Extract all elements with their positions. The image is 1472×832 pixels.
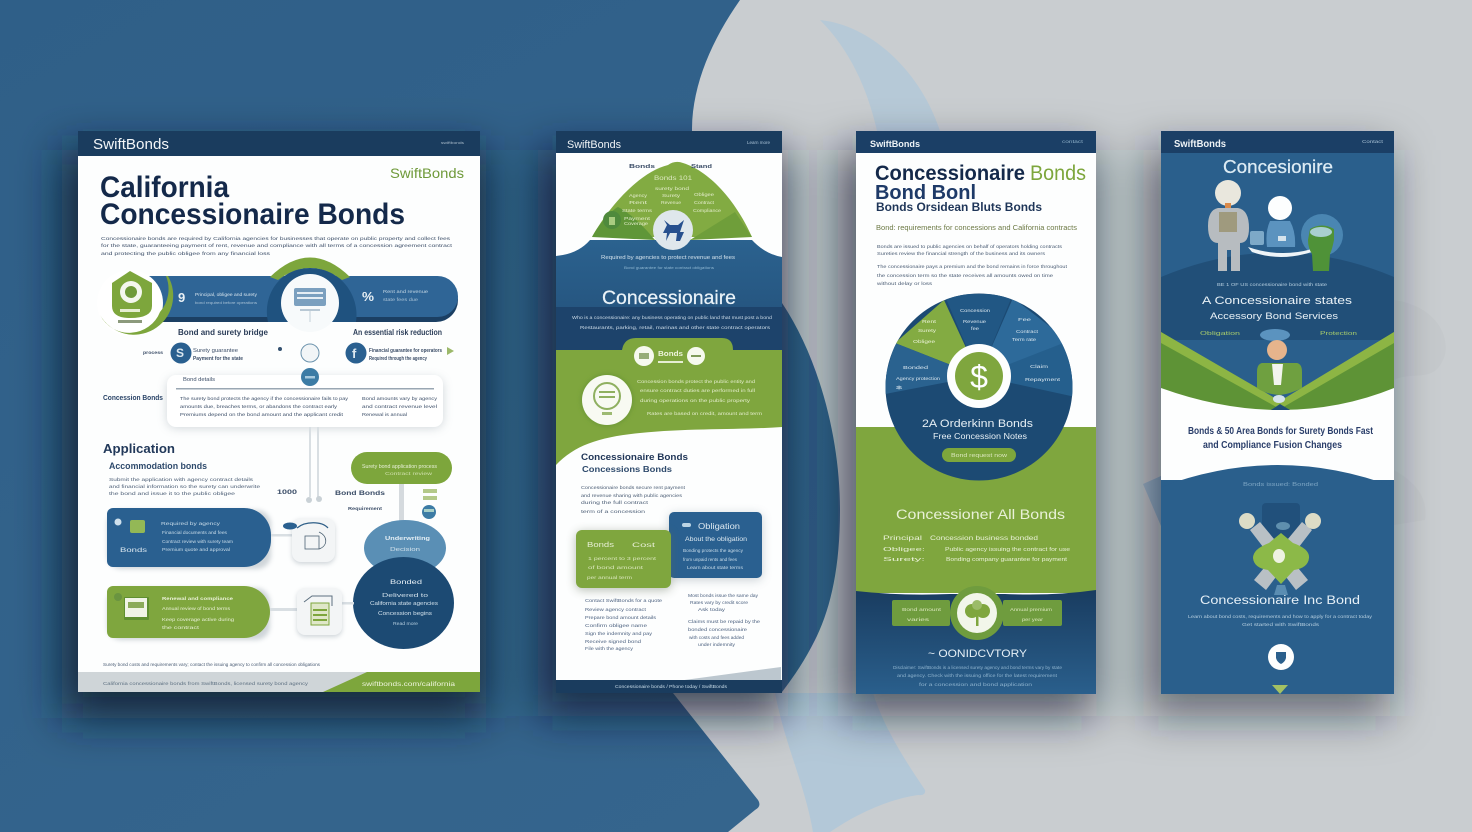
left column text: Receive signed bond: [585, 639, 641, 645]
bond details card: Renewal is annual: [362, 412, 407, 417]
blue wave: [556, 240, 782, 350]
light blue circle: Underwriting: [385, 536, 430, 542]
left column text: Contact SwiftBonds for a quote: [585, 598, 662, 604]
subheadings: [178, 328, 442, 337]
green application card: Annual review of bond terms: [162, 606, 231, 612]
panel shadows: [62, 150, 1390, 718]
blue application card: Financial documents and fees: [162, 530, 228, 535]
green dome: Surety: [662, 193, 681, 198]
steps row: Financial guarantee for operators: [369, 348, 442, 354]
header bar: [1161, 131, 1394, 153]
icon: green shield badge: [97, 270, 173, 336]
green application card: Renewal and compliance: [162, 596, 233, 602]
icon: document screen: [294, 288, 326, 322]
left column text: Sign the indemnity and pay: [585, 631, 653, 637]
header bar: SwiftBonds: [1174, 139, 1226, 150]
center dollar icon: $: [970, 359, 988, 395]
blue application card: Contract review with surety team: [162, 539, 233, 544]
dark band: Who is a concessionaire: any business operating on public land that must post a bond: [572, 315, 772, 321]
banner: process pill: Principal, obligee and surety: [195, 292, 258, 298]
green application card: [107, 586, 270, 640]
right column text: with costs and fees added: [689, 635, 744, 641]
wave text: [601, 255, 736, 270]
application text: the bond and issue it to the public obligee: [109, 491, 236, 496]
left label: Concession Bonds: [103, 393, 163, 402]
panel 4: Concessionaire people: [1161, 131, 1394, 694]
intro text: [101, 236, 453, 257]
green pill: Contract review: [385, 471, 433, 476]
wave text: Bond guarantee for state contract obligations: [624, 265, 714, 270]
green card: 1 percent to 3 percent: [588, 556, 657, 562]
application text: and financial information so the surety can underwrite: [109, 484, 261, 489]
right column text: bonded concessionaire: [688, 627, 747, 633]
wheel chart: Surety: [918, 328, 937, 333]
header bar: SwiftBonds: [93, 136, 169, 153]
wheel chart: Fee: [1018, 317, 1032, 322]
left column text: Review agency contract: [585, 607, 647, 613]
subheadings: Bond and surety bridge: [178, 328, 269, 337]
panel 2: Concessionaire: [556, 131, 782, 693]
bond details card: Premiums depend on the bond amount and the applicant credit: [180, 412, 344, 417]
dark footer section: per year: [1022, 617, 1043, 623]
green section text: Obligee:: [883, 547, 926, 553]
banner: process pill: state fees due: [383, 297, 419, 302]
wheel chart: Bonded: [903, 365, 929, 370]
dark blue circle: Read more: [393, 621, 419, 626]
wheel chart: fee: [971, 326, 980, 331]
green section text: Concession business bonded: [930, 535, 1038, 542]
dark band: Restaurants, parking, retail, marinas and other state contract operators: [580, 325, 771, 331]
green section: [856, 427, 1096, 593]
green dome: Payment: [624, 216, 651, 221]
wheel chart: 2A Orderkinn Bonds: [922, 418, 1034, 430]
connector: [306, 427, 322, 503]
blue card: from unpaid rents and fees: [683, 557, 738, 562]
left column text: File with the agency: [585, 646, 634, 652]
right column text: under indemnity: [698, 642, 736, 648]
intro text: the concession term so the state receives all amounts owed on time: [877, 273, 1053, 279]
green application card: Keep coverage active during: [162, 617, 234, 623]
title: Concessionaire: [875, 162, 1025, 185]
dark footer section: and agency. Check with the issuing office for the latest requirement: [897, 673, 1058, 679]
small labels: Bond Bonds: [335, 491, 386, 497]
blue card: About the obligation: [685, 537, 747, 543]
banner: process pill: Rent and revenue: [383, 289, 429, 294]
application heading: Application: [103, 442, 175, 456]
footer band: swiftbonds.com/california: [362, 682, 456, 688]
banner: process pill: [120, 258, 458, 332]
footer band: [78, 672, 480, 692]
right column text: Ask today: [698, 607, 726, 613]
figures illustration: [1208, 180, 1343, 271]
title: Bond Bonl: [875, 182, 976, 204]
dark footer section: varies: [907, 617, 930, 623]
title: [100, 171, 405, 231]
wheel chart: Repayment: [1025, 377, 1061, 382]
dark blue circle: Concession begins: [378, 611, 433, 617]
panel 1: California Concessionaire Bonds: [78, 131, 480, 692]
white section text: and Compliance Fusion Changes: [1203, 440, 1342, 451]
header bar: Contact: [1362, 139, 1384, 144]
subheading: [581, 452, 688, 474]
green card: per annual term: [587, 575, 632, 581]
title: Bonds Orsidean Bluts Bonds: [876, 202, 1042, 214]
wheel chart: $: [896, 385, 903, 390]
text block: Accessory Bond Services: [1210, 311, 1338, 322]
icon: crossed emblem: [1239, 503, 1321, 595]
light blue circle: Decision: [390, 547, 420, 553]
right column text: Most bonds issue the same day: [688, 593, 759, 599]
green dome: [592, 162, 752, 240]
blue card: Bonding protects the agency: [683, 548, 744, 553]
text block: A Concessionaire states: [1202, 295, 1353, 307]
small labels: 1000: [277, 490, 298, 496]
dark blue circle: California state agencies: [370, 601, 439, 607]
dark blue circle: Delivered to: [382, 593, 428, 599]
green card: Bonds: [587, 542, 615, 549]
text block: Obligation: [1200, 331, 1240, 337]
title: Bonds: [1030, 162, 1086, 185]
green button: [942, 448, 1016, 462]
dark footer section: Disclaimer: SwiftBonds is a licensed surety agency and bond terms vary by state: [893, 665, 1062, 671]
green card: Cost: [632, 542, 655, 549]
green dome: surety bond: [655, 186, 690, 191]
arrow: [1272, 685, 1288, 694]
lower blue section: Bonds issued: Bonded: [1243, 482, 1318, 488]
bond details card: Bond amounts vary by agency: [362, 396, 438, 401]
header bar: [78, 131, 480, 156]
banner: process pill: bond required before operations: [195, 300, 257, 305]
green dome: Agency: [629, 193, 648, 198]
olive line: Bond: requirements for concessions and California contracts: [876, 225, 1078, 232]
left column text: Confirm obligee name: [585, 623, 647, 629]
intro text: and protecting the public obligee from any financial loss: [101, 251, 271, 257]
green section: Concession bonds protect the public entity and: [637, 379, 755, 385]
footer band: California concessionaire bonds from SwiftBonds, licensed surety bond agency: [103, 681, 309, 686]
icon: shield button: [1268, 644, 1294, 670]
steps row: process: [143, 350, 164, 355]
body text: during the full contract: [581, 500, 649, 506]
steps row: f: [352, 346, 357, 361]
intro text: [877, 244, 1068, 287]
header bar: SwiftBonds: [567, 139, 621, 151]
heading: Concessionaire: [602, 288, 736, 309]
green section: Bonds: [658, 351, 683, 358]
steps row: Surety guarantee: [193, 348, 238, 354]
wheel chart: Term rate: [1012, 337, 1037, 342]
header bar: [556, 131, 782, 153]
banner: process pill: %: [362, 289, 374, 304]
right column text: Claims must be repaid by the: [688, 619, 760, 625]
green card: [576, 530, 671, 590]
text block: BE 1 OF US concessionaire bond with state: [1217, 282, 1327, 288]
blue card: Obligation: [698, 522, 740, 531]
header bar: contact: [1062, 139, 1084, 144]
small labels: Requirement: [348, 506, 383, 511]
icon: tree medallion: [950, 586, 1004, 640]
application text: [109, 477, 261, 496]
wheel chart: [880, 293, 1080, 481]
bond details card: [167, 368, 443, 428]
subheading: Concessions Bonds: [582, 464, 672, 474]
intro text: Concessionaire bonds are required by California agencies for businesses that operate on public property and collect fees: [101, 236, 451, 242]
wheel chart: Free Concession Notes: [933, 431, 1027, 441]
dark footer section: Bond amount: [902, 607, 942, 613]
subheadings: An essential risk reduction: [353, 328, 442, 337]
wave text: Required by agencies to protect revenue and fees: [601, 255, 736, 261]
blue application card: Required by agency: [161, 521, 221, 526]
wheel chart: Agency protection: [896, 376, 941, 381]
header bar: Learn more: [747, 140, 770, 145]
banner: process pill: 9: [178, 290, 185, 305]
left column text: Prepare bond amount details: [585, 615, 657, 621]
text block: [1200, 282, 1357, 337]
bond details card: The surety bond protects the agency if the concessionaire fails to pay: [180, 396, 349, 401]
green card: of bond amount: [588, 565, 644, 571]
blue card: [669, 512, 762, 580]
lower blue section: [1161, 465, 1394, 694]
wheel chart: Claim: [1030, 364, 1048, 369]
text block: Protection: [1320, 331, 1357, 337]
green dome: Contract: [694, 200, 715, 205]
title: California: [100, 171, 229, 204]
bond details card: and contract revenue level: [362, 404, 437, 409]
dark arc: [1161, 252, 1394, 340]
green section text: Principal: [883, 535, 923, 542]
green pill: [351, 452, 452, 522]
green logo: SwiftBonds: [390, 165, 464, 181]
dark blue circle: Bonded: [390, 579, 423, 586]
dark footer section: ~ OONIDCVTORY: [928, 648, 1028, 660]
green pill: Surety bond application process: [362, 464, 438, 470]
green dome: State terms: [622, 208, 653, 213]
green section: [556, 338, 782, 465]
application heading: Accommodation bonds: [109, 461, 207, 471]
dark footer section: Annual premium: [1010, 607, 1052, 613]
footer: Concessionaire bonds / Phone today / SwiftBonds: [615, 684, 728, 690]
dark blue circle: [353, 557, 454, 649]
body text: Concessionaire bonds secure rent payment: [581, 485, 686, 491]
header bar: SwiftBonds: [870, 139, 920, 150]
panel 3: Concessionaire Bonds wheel: [856, 131, 1096, 694]
white section text: Bonds & 50 Area Bonds for Surety Bonds Fast: [1188, 426, 1374, 437]
green dome: Bonds 101: [654, 176, 693, 182]
white section text: [1188, 426, 1374, 451]
wheel chart: Rent: [922, 319, 937, 324]
body text: [581, 485, 686, 515]
right column text: Rates vary by credit score: [690, 600, 748, 606]
dark footer section: for a concession and bond application: [919, 682, 1032, 688]
steps row: S: [176, 346, 184, 360]
heading: Concesionire: [1223, 157, 1333, 177]
steps row: Payment for the state: [193, 356, 243, 362]
wheel chart: Contract: [1016, 329, 1039, 334]
blue application card: Bonds: [120, 548, 147, 554]
green chevron: [1161, 332, 1394, 480]
wedge behind panel 4: [1143, 476, 1161, 526]
title: [875, 162, 1086, 214]
lower blue section: Learn about bond costs, requirements and how to apply for a contract today: [1188, 614, 1373, 620]
blue card: Learn about state terms: [687, 565, 744, 570]
blue application card: [107, 508, 271, 569]
body text: term of a concession: [581, 509, 645, 515]
green button: Bond request now: [951, 453, 1008, 459]
lower blue section: Get started with SwiftBonds: [1242, 622, 1320, 628]
small labels: [277, 490, 386, 511]
title: Concessionaire Bonds: [100, 198, 405, 231]
green dome: Obligee: [694, 192, 715, 197]
green section text: [883, 507, 1070, 563]
header bar: swiftbonds: [441, 140, 464, 145]
center dollar icon: [947, 344, 1011, 408]
green section text: Bonding company guarantee for payment: [946, 557, 1068, 563]
connector and icon tile: building: [271, 518, 335, 564]
subheading: Concessionaire Bonds: [581, 452, 688, 463]
wheel chart: Revenue: [963, 319, 987, 324]
bond details card: amounts due, breaches terms, or abandons the contract early: [180, 404, 338, 409]
wheel chart: Obligee: [913, 339, 936, 344]
green dome: Compliance: [693, 208, 722, 213]
application heading: [103, 442, 207, 471]
intro text: Sureties review the financial strength of the business and its owners: [877, 251, 1046, 257]
lower blue section: Concessionaire Inc Bond: [1200, 595, 1360, 607]
light blue circle: [364, 520, 446, 576]
intro text: The concessionaire pays a premium and the bond remains in force throughout: [877, 264, 1068, 270]
blue application card: Premium quote and approval: [162, 547, 230, 552]
footnote: Surety bond costs and requirements vary; contact the issuing agency to confirm all concession obligations: [103, 662, 321, 667]
steps row: Required through the agency: [369, 356, 427, 362]
green section: Rates are based on credit, amount and term: [647, 411, 762, 417]
green section text: Public agency issuing the contract for use: [945, 547, 1070, 553]
body text: and revenue sharing with public agencies: [581, 493, 683, 499]
green section: ensure contract duties are performed in full: [640, 388, 755, 394]
green section: during operations on the public property: [640, 398, 751, 404]
green dome: Revenue: [661, 200, 682, 205]
intro text: Bonds are issued to public agencies on behalf of operators holding contracts: [877, 244, 1063, 250]
intro text: without delay or loss: [877, 281, 933, 287]
application text: Submit the application with agency contract details: [109, 477, 254, 482]
right column text: [688, 593, 760, 648]
icon: concession emblem: [653, 210, 693, 250]
green section text: Surety:: [883, 557, 926, 563]
connector and icon tile: document: [270, 588, 354, 637]
wheel chart: Concession: [960, 308, 991, 313]
small green list and icon: [422, 489, 437, 519]
intro text: for the state, guaranteeing payment of rent, revenue and compliance with all terms of a concession agreement contract: [101, 243, 453, 249]
green dome: Bonds: [629, 164, 655, 170]
header bar: [856, 131, 1096, 153]
steps row: [143, 342, 454, 364]
dark footer section: [856, 586, 1096, 694]
green section text: Concessioner All Bonds: [896, 507, 1065, 522]
bond details card: Bond details: [183, 377, 216, 383]
footer: [556, 667, 782, 693]
dark band: [556, 307, 782, 350]
green dome: Stand: [691, 164, 712, 170]
green dome: Coverage: [624, 221, 649, 226]
green application card: the contract: [162, 625, 200, 631]
left column text: [585, 598, 662, 652]
center figure: [1257, 329, 1302, 403]
green dome: Rent: [629, 200, 648, 205]
